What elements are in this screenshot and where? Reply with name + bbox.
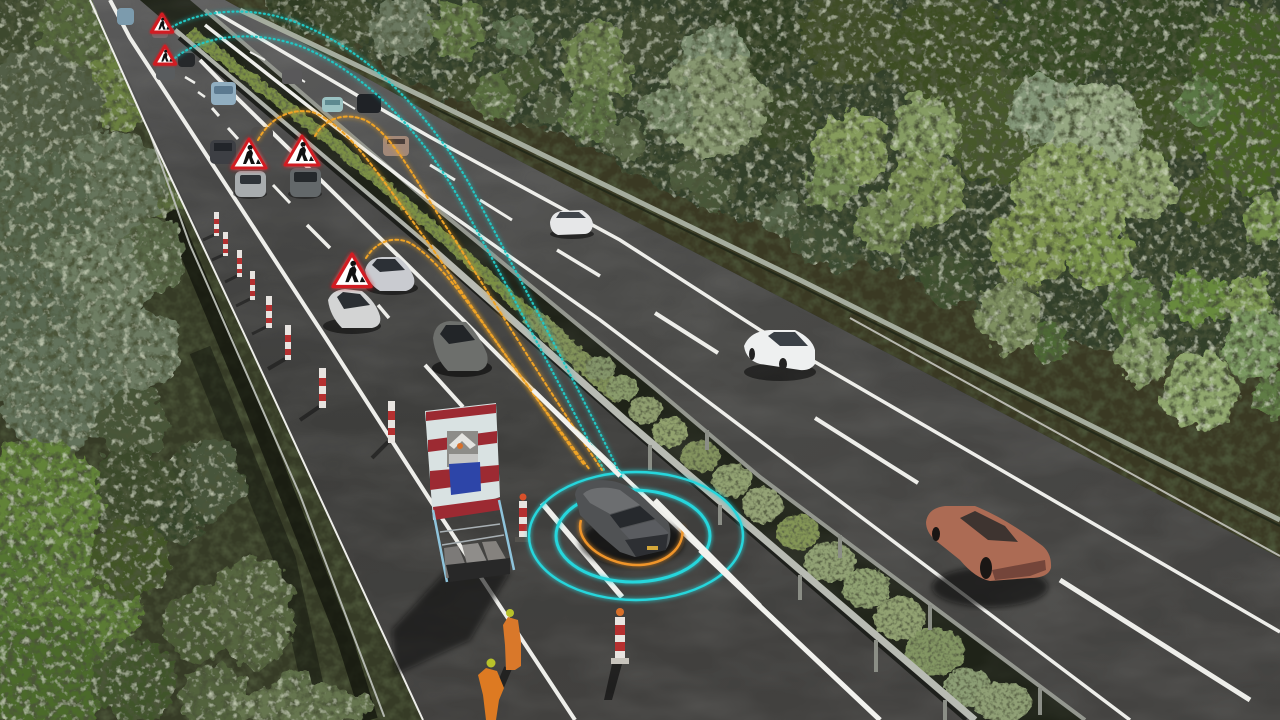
board frame: [433, 500, 514, 582]
verge guard rail: [148, 128, 384, 716]
warning sign 5: [333, 254, 371, 287]
distant cars: [117, 8, 409, 199]
car: grey top: [152, 26, 168, 38]
car: silver: [233, 171, 267, 199]
board shadow: [392, 572, 510, 675]
car: far grey: [282, 70, 302, 84]
car: dark grey near signs: [288, 168, 322, 199]
outer cyan ring: [529, 472, 743, 600]
car: grey far: [156, 65, 175, 80]
roadwork sign board: [392, 403, 514, 675]
orange signal arc 1: [258, 111, 590, 470]
bollard: [212, 232, 228, 260]
car: grey mid lane: [432, 321, 492, 377]
car: far teal: [322, 97, 343, 112]
bollard: [236, 271, 255, 306]
middle cyan ring: [556, 490, 710, 582]
worker: foreground: [478, 658, 504, 720]
bollard: [252, 296, 272, 334]
car: far orange-grey: [383, 136, 409, 156]
orange signal arc 3: [366, 240, 585, 466]
board panel: [425, 403, 500, 520]
worker: standing: [490, 609, 521, 710]
median hedge: [190, 32, 1032, 720]
bollard: [203, 212, 219, 240]
cyan signal arc 1: [172, 12, 622, 478]
lower forest bushes beside verge: [187, 436, 375, 720]
warning sign 2: [154, 46, 176, 64]
bollard: [604, 608, 629, 700]
car: dark grey: [251, 127, 273, 147]
outer right guard rail: [240, 10, 1280, 556]
median guard rails: [175, 10, 1085, 720]
detection rings and ego car: [529, 472, 743, 600]
car: dark sedan: [210, 140, 236, 164]
sandbags: [444, 541, 510, 582]
warning triangles: [151, 14, 371, 287]
car: white right lane: [744, 330, 816, 381]
orange signal arc 2: [315, 117, 602, 470]
orange ring: [580, 520, 682, 565]
bollard: [225, 250, 242, 282]
car: copper sports car: [926, 506, 1051, 607]
left forest: [0, 0, 334, 720]
bollard: [300, 368, 326, 420]
bollard: [515, 494, 531, 542]
left carriageway solid lines: [90, 0, 880, 720]
car: black far: [178, 53, 195, 67]
bollard: [372, 401, 395, 458]
left grass verge: [0, 121, 422, 720]
car: white near sign (lower): [323, 289, 381, 334]
cyan signal arc 2: [175, 36, 605, 472]
warning sign 1: [151, 14, 173, 32]
ego car: [575, 480, 670, 557]
delineator bollards: [203, 212, 629, 700]
bollard: [268, 325, 291, 369]
red stripes: [426, 404, 500, 520]
right wooded embankment: [225, 0, 1280, 560]
ego car shadow: [580, 518, 684, 566]
central median: [140, 0, 1085, 720]
warning sign 3: [232, 139, 266, 168]
left carriageway: [92, 0, 975, 720]
blue panel: [449, 462, 481, 495]
car: far black: [357, 94, 381, 113]
emblem: [447, 431, 478, 467]
warning sign 4: [285, 136, 319, 165]
car: blue far: [117, 8, 134, 25]
road line passing through rings: [533, 390, 880, 720]
lane dashes: [185, 52, 1250, 700]
right forest: [225, 0, 1280, 430]
v2x signal arcs: [172, 12, 622, 478]
car: white near sign (upper): [365, 257, 418, 295]
car: van: [211, 82, 236, 105]
car: white far right lane: [550, 210, 594, 239]
